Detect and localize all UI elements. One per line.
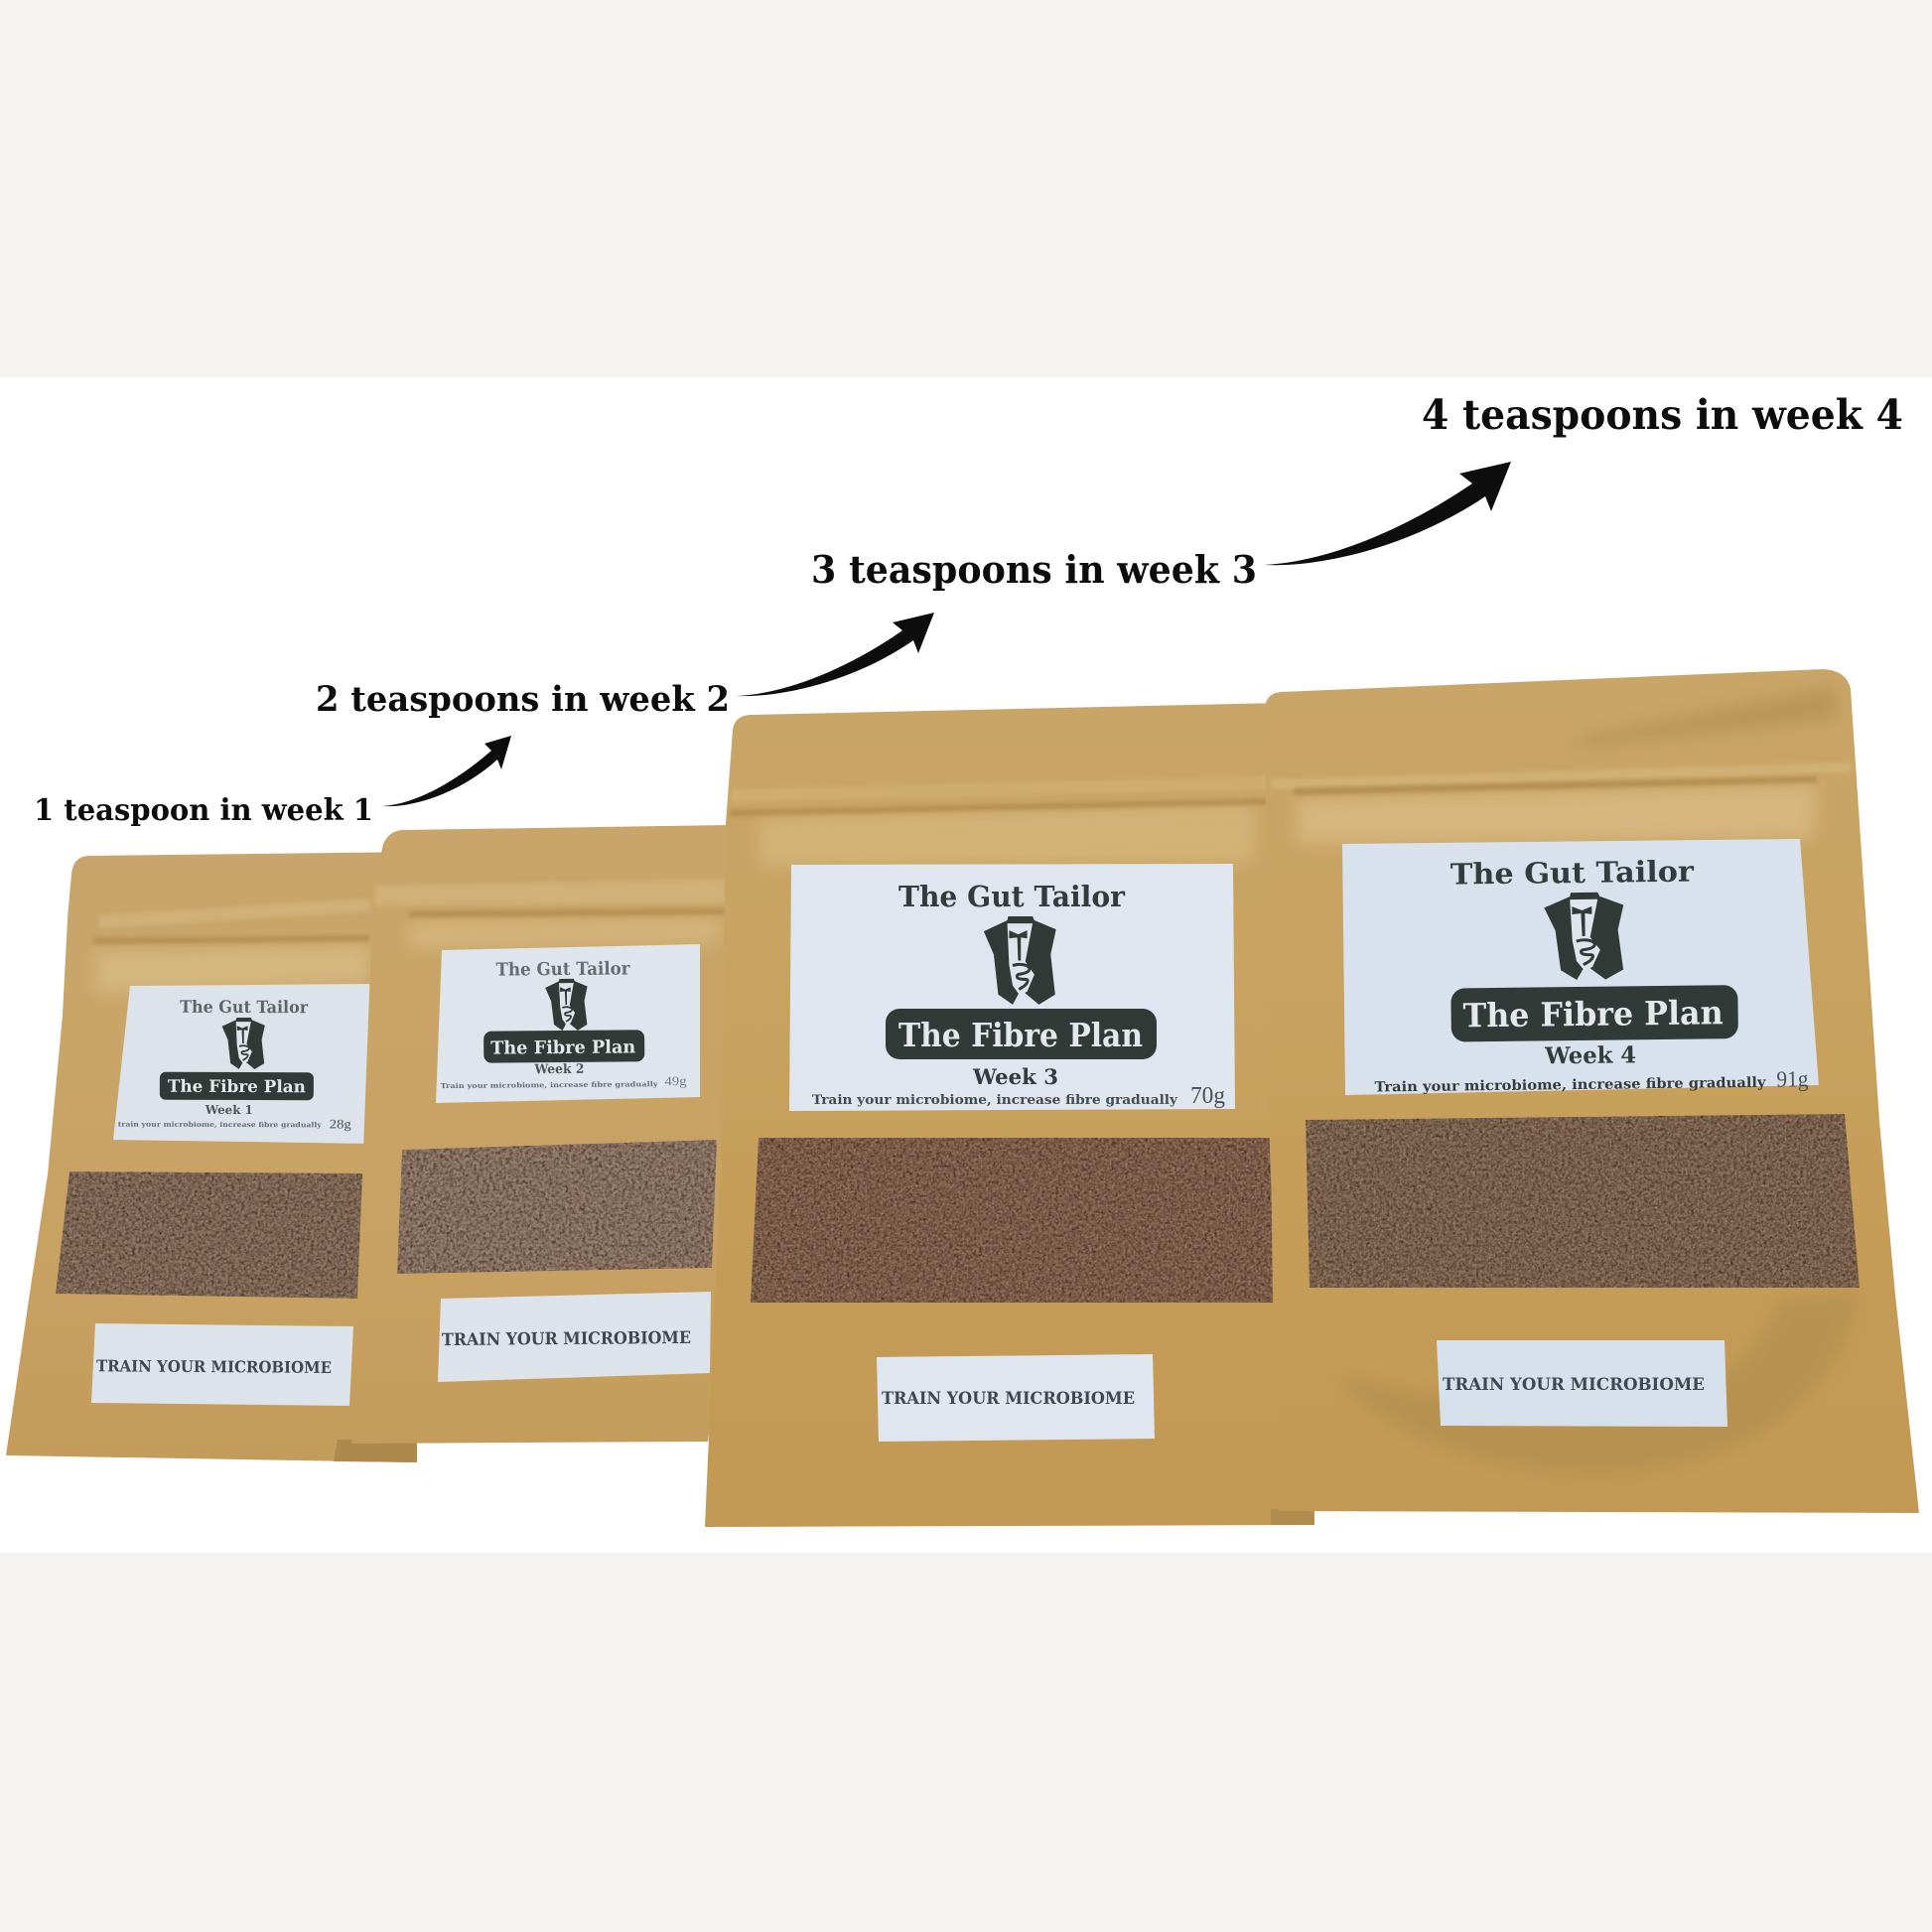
pouch: week 4	[1265, 669, 1919, 1513]
tagline: Train your microbiome, increase fibre gradually	[812, 1093, 1177, 1108]
plan badge	[483, 1030, 644, 1063]
weight: 91g	[1776, 1066, 1809, 1092]
arrow: week 1 to week 2	[382, 736, 511, 806]
pouch: week 3	[705, 703, 1314, 1527]
brand name: The Gut Tailor	[898, 880, 1126, 913]
plan badge	[1450, 985, 1738, 1042]
plan badge: The Fibre Plan	[490, 1036, 635, 1059]
window: week 3 powder	[751, 1138, 1273, 1303]
weight: 28g	[330, 1116, 351, 1131]
arrow: week 3 to week 4	[1264, 462, 1511, 565]
label: week 2	[436, 944, 700, 1103]
plan badge: The Fibre Plan	[168, 1077, 306, 1097]
bottom label: week 2	[438, 1292, 711, 1382]
window: week 2 powder	[397, 1140, 717, 1274]
label: week 3	[789, 864, 1235, 1111]
white photo band	[0, 377, 1932, 1553]
heading: week 2 dose: 2 teaspoons in week 2	[316, 679, 730, 720]
plan badge: The Fibre Plan	[898, 1016, 1143, 1054]
weight: 70g	[1190, 1083, 1225, 1109]
weight: 49g	[664, 1073, 687, 1088]
week text: Week 2	[533, 1062, 584, 1077]
label: week 1	[113, 984, 370, 1144]
bottom label: week 4	[1437, 1340, 1727, 1427]
bottom label: week 1: TRAIN YOUR MICROBIOME	[96, 1356, 332, 1377]
window: week 1 powder	[56, 1172, 363, 1299]
week text: Week 3	[972, 1064, 1058, 1089]
tagline: train your microbiome, increase fibre gradually	[118, 1120, 323, 1129]
bottom label: week 1	[91, 1323, 353, 1406]
heading: week 3 dose: 3 teaspoons in week 3	[811, 547, 1257, 592]
bottom label: week 3	[877, 1354, 1155, 1442]
icon: vest	[1544, 892, 1624, 980]
brand name: The Gut Tailor	[495, 958, 630, 981]
tagline: Train your microbiome, increase fibre gradually	[441, 1079, 659, 1090]
tagline: Train your microbiome, increase fibre gradually	[1374, 1075, 1766, 1096]
bottom label: week 4: TRAIN YOUR MICROBIOME	[1443, 1375, 1705, 1395]
pouch: week 2	[351, 825, 730, 1444]
window: week 4 powder	[1306, 1114, 1860, 1288]
heading: week 1 dose: 1 teaspoon in week 1	[34, 793, 373, 828]
brand name: The Gut Tailor	[180, 998, 309, 1018]
arrow: week 2 to week 3	[736, 613, 934, 696]
label: week 4	[1342, 839, 1819, 1097]
pouch: week 1	[6, 852, 417, 1462]
icon: vest	[984, 916, 1056, 1005]
week text: Week 1	[205, 1103, 253, 1117]
heading: week 4 dose: 4 teaspoons in week 4	[1422, 391, 1903, 439]
icon: vest	[545, 979, 588, 1031]
week text: Week 4	[1544, 1041, 1636, 1069]
plan badge: The Fibre Plan	[1462, 993, 1724, 1035]
plan badge	[160, 1072, 314, 1100]
icon: vest	[221, 1018, 265, 1069]
bottom label: week 2: TRAIN YOUR MICROBIOME	[442, 1328, 691, 1350]
bottom gusset shadow	[1337, 1291, 1859, 1473]
bottom label: week 3: TRAIN YOUR MICROBIOME	[882, 1389, 1135, 1409]
brand name: The Gut Tailor	[1450, 855, 1695, 892]
